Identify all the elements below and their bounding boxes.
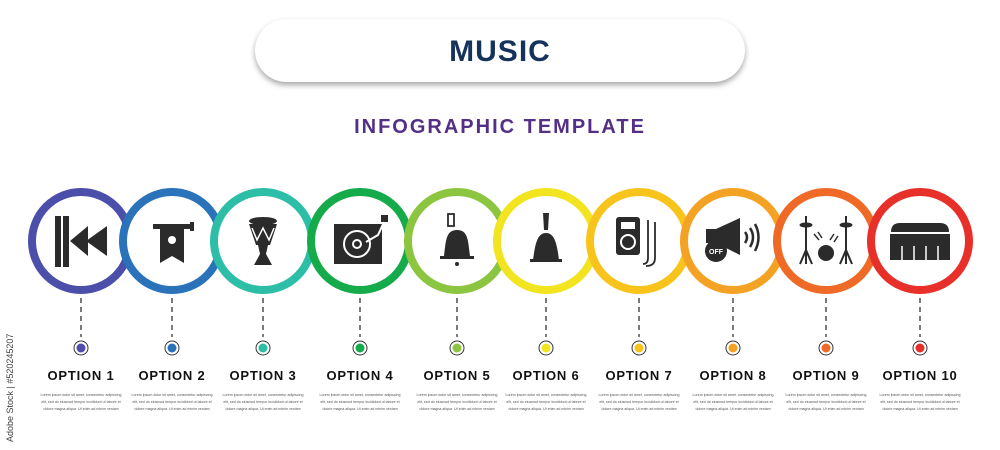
connectors xyxy=(81,298,920,337)
icon: herald trumpet xyxy=(153,222,194,263)
title: MUSIC xyxy=(449,35,551,68)
option labels: OPTION 6 xyxy=(512,368,580,383)
icon: hand bell xyxy=(440,214,474,266)
option labels: OPTION 5 xyxy=(423,368,491,383)
descriptions xyxy=(41,393,960,411)
icon: speaker off: OFF xyxy=(709,249,724,256)
icon: desk bell xyxy=(530,213,562,262)
icon: piano keys xyxy=(890,223,950,260)
icon: mp3 player xyxy=(616,217,655,266)
side credit: Adobe Stock | #520245207 xyxy=(5,334,15,442)
subtitle: INFOGRAPHIC TEMPLATE xyxy=(354,116,646,138)
title pill xyxy=(255,19,745,82)
icon: djembe drum xyxy=(249,217,277,265)
icon: speaker off xyxy=(705,218,758,262)
markers xyxy=(74,341,927,355)
icon: rewind xyxy=(55,216,107,267)
icon: turntable xyxy=(334,215,388,264)
circles row xyxy=(32,192,969,290)
option labels: OPTION 2 xyxy=(138,368,206,383)
option labels: OPTION 10 xyxy=(882,368,958,383)
option labels: OPTION 9 xyxy=(792,368,860,383)
option labels: OPTION 4 xyxy=(326,368,394,383)
option labels: OPTION 7 xyxy=(605,368,673,383)
option labels: OPTION 1 xyxy=(47,368,115,383)
option labels: OPTION 8 xyxy=(699,368,767,383)
icon: drum kit xyxy=(800,216,852,264)
option labels xyxy=(47,368,958,383)
option labels: OPTION 3 xyxy=(229,368,297,383)
